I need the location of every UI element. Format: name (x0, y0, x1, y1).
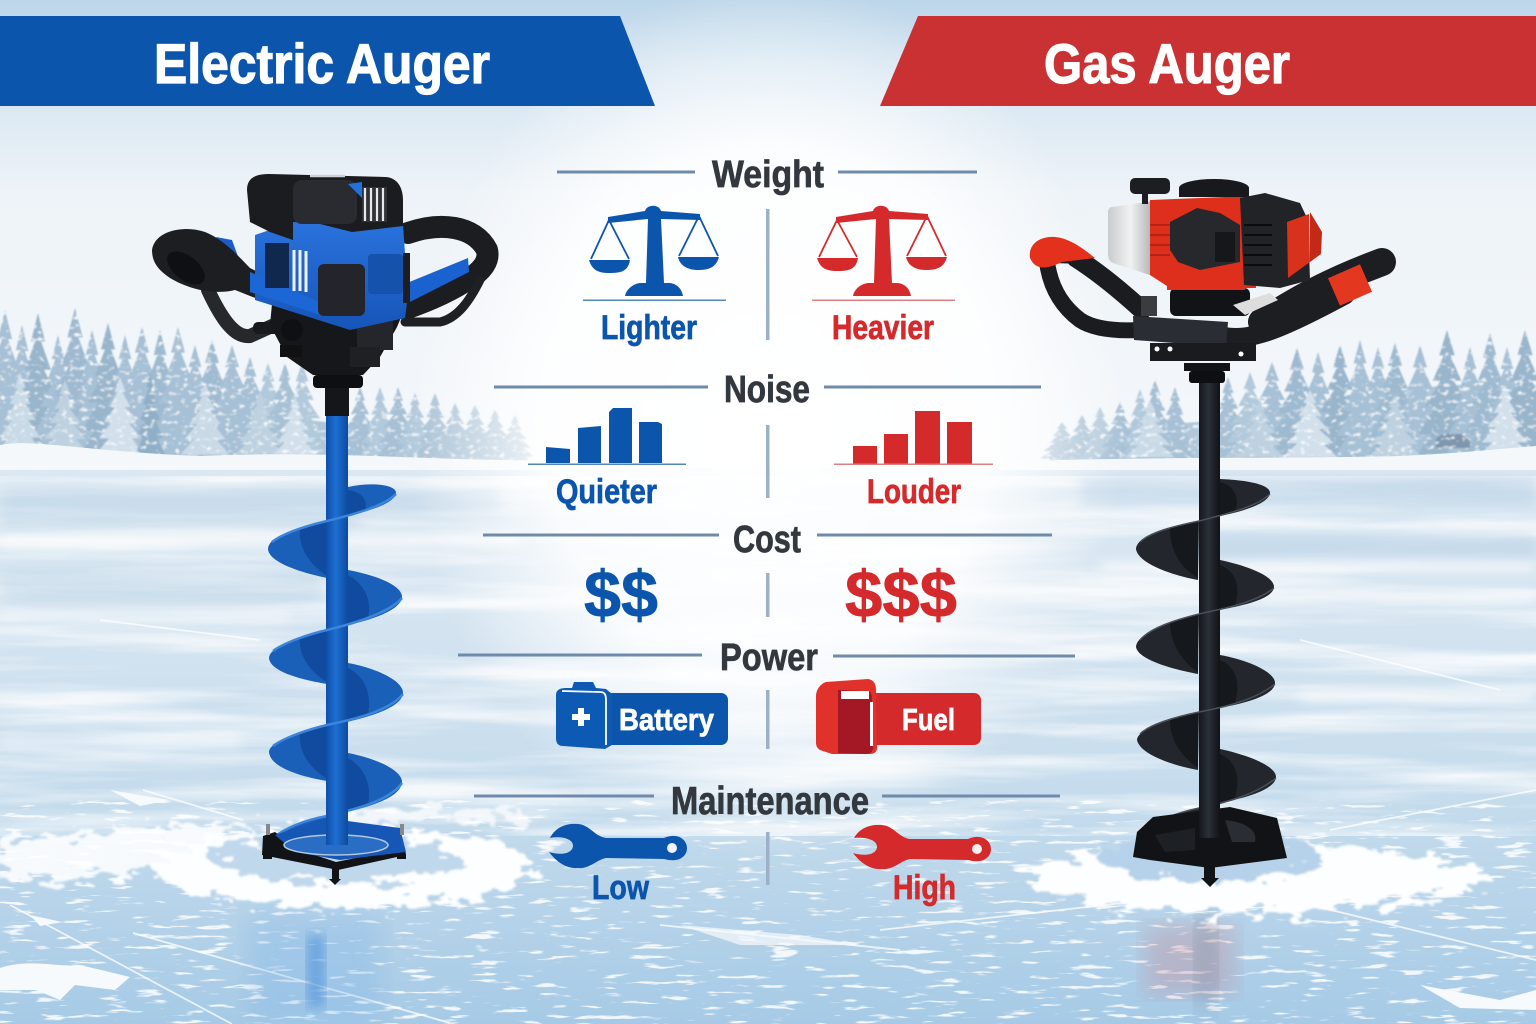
label: Low: Low (592, 869, 649, 907)
heading: Maintenance: Maintenance (671, 780, 869, 823)
heading: Weight: Weight (712, 154, 824, 196)
icon: red scale, heavier (812, 206, 955, 301)
electric auger (152, 174, 488, 885)
icon: blue noise bars (528, 408, 686, 465)
header: Gas Auger (880, 16, 1536, 106)
gas auger: frame and mount (1133, 288, 1278, 383)
label: Lighter: Lighter (601, 309, 697, 347)
electric auger: base plate (262, 800, 406, 885)
background: right treeline (1040, 330, 1536, 462)
electric auger: battery pack (247, 174, 403, 240)
label: Heavier: Heavier (832, 309, 934, 347)
electric auger: handles (152, 227, 488, 336)
heading: Weight (557, 154, 977, 196)
icon: battery pill (556, 682, 728, 749)
label: Quieter: Quieter (556, 473, 657, 511)
gas auger: black spiral bit (1136, 380, 1276, 842)
heading: Cost: Cost (733, 519, 801, 561)
icon: red wrench (853, 825, 991, 869)
electric auger: gearbox (270, 293, 407, 416)
heading: Noise (494, 369, 1041, 411)
background: snow around left auger (0, 810, 535, 908)
comparison row: Cost (483, 519, 1052, 631)
background: snow around right auger (1025, 834, 1490, 914)
header: Electric Auger (0, 16, 655, 106)
value: two dollar signs: $$ (584, 557, 658, 631)
comparison row: Power (458, 637, 1075, 754)
heading: Cost (483, 519, 1052, 561)
gas auger (1030, 178, 1382, 887)
label: High: High (893, 869, 956, 907)
background: central white haze (408, 0, 1128, 860)
gas auger: handles (1030, 237, 1382, 337)
icon: fuel can pill: Fuel (902, 702, 955, 737)
electric auger: blue motor housing (250, 222, 410, 330)
comparison row: Maintenance (474, 780, 1060, 907)
header: Gas Auger: Gas Auger (1044, 32, 1290, 95)
electric auger: blue spiral bit (268, 412, 403, 847)
icon: battery pill: Battery (619, 702, 715, 737)
comparison row: Noise (494, 369, 1041, 511)
heading: Maintenance (474, 780, 1060, 823)
value: three dollar signs: $$$ (845, 557, 957, 631)
icon: red noise bars (834, 411, 993, 465)
background: frozen lake (0, 443, 1536, 1024)
icon: fuel can pill (816, 679, 981, 754)
icon: blue scale, lighter (583, 206, 726, 301)
background: left treeline (0, 308, 534, 465)
icon: blue wrench (549, 824, 687, 868)
label: Louder: Louder (867, 473, 961, 511)
background: winter sky (0, 0, 1536, 480)
gas auger: black base (1133, 800, 1287, 887)
heading: Noise: Noise (724, 369, 810, 411)
header: Electric Auger: Electric Auger (154, 32, 490, 95)
comparison row: Weight (557, 154, 977, 347)
heading: Power: Power (720, 637, 818, 679)
gas auger: engine (1108, 178, 1322, 290)
heading: Power (458, 637, 1075, 679)
